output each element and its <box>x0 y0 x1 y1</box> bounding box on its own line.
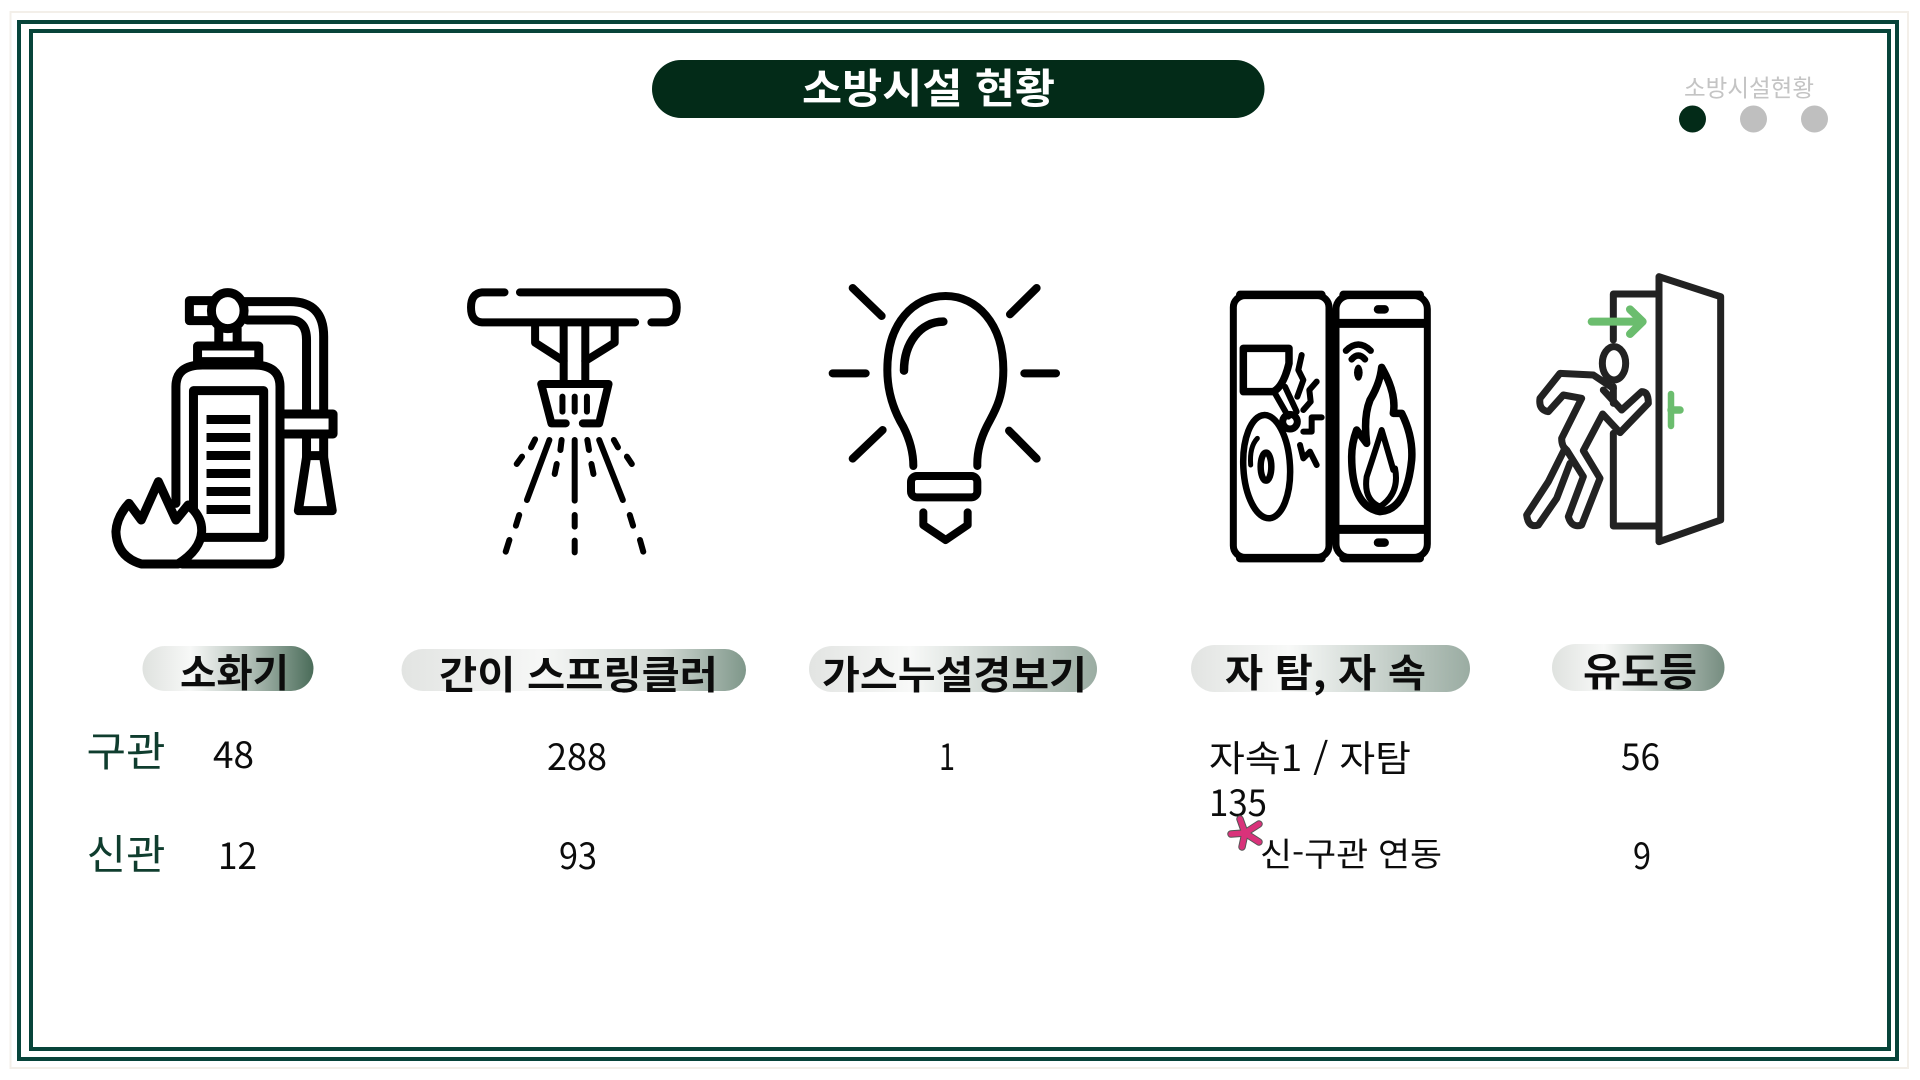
icon: fire extinguisher <box>116 293 333 564</box>
label pill: 유도등: 유도등 <box>1583 642 1697 698</box>
values: 구관 row: 1 <box>939 729 955 781</box>
icon: emergency exit <box>1527 277 1721 542</box>
detection and sprinkler note: 자속1 / 자탐 <box>1209 730 1411 782</box>
title banner <box>652 55 1264 118</box>
row label: 신관: 신관 <box>86 821 166 881</box>
label pill: 소화기: 소화기 <box>180 643 289 699</box>
values: 신관 row: 9 <box>1633 828 1651 880</box>
row label: 구관: 구관 <box>86 718 166 778</box>
icon: pink asterisk mark <box>1231 819 1259 847</box>
values: 구관 row: 288 <box>547 729 607 781</box>
values: 신관 row: 93 <box>559 828 597 880</box>
title banner: 소방시설 현황 <box>802 55 1055 115</box>
detection and sprinkler note <box>1209 730 1442 876</box>
icon: light bulb <box>833 288 1056 540</box>
values: 구관 row: 56 <box>1621 729 1660 781</box>
label pill: 간이 스프링클러: 간이 스프링클러 <box>439 645 718 701</box>
icon: sprinkler <box>471 292 677 552</box>
values: 구관 row <box>213 727 1660 781</box>
label pill: 유도등 <box>1552 642 1724 698</box>
detection and sprinkler note: 135 <box>1209 775 1267 827</box>
values: 신관 row <box>218 828 1651 880</box>
navigator label: 소방시설현황 <box>1684 68 1814 104</box>
label pill: 가스누설경보기: 가스누설경보기 <box>822 645 1087 701</box>
icon: fire alarm and smartphone <box>1233 295 1427 558</box>
values: 신관 row: 12 <box>218 828 257 880</box>
label pill: 자탐, 자속: 자 탐, 자 속 <box>1225 643 1426 699</box>
detection and sprinkler note: 신-구관 연동 <box>1260 828 1442 876</box>
section navigator <box>1679 68 1828 132</box>
label pill: 소화기 <box>142 643 314 699</box>
values: 구관 row: 48 <box>213 727 254 779</box>
label pill: 자탐, 자속 <box>1191 643 1470 699</box>
